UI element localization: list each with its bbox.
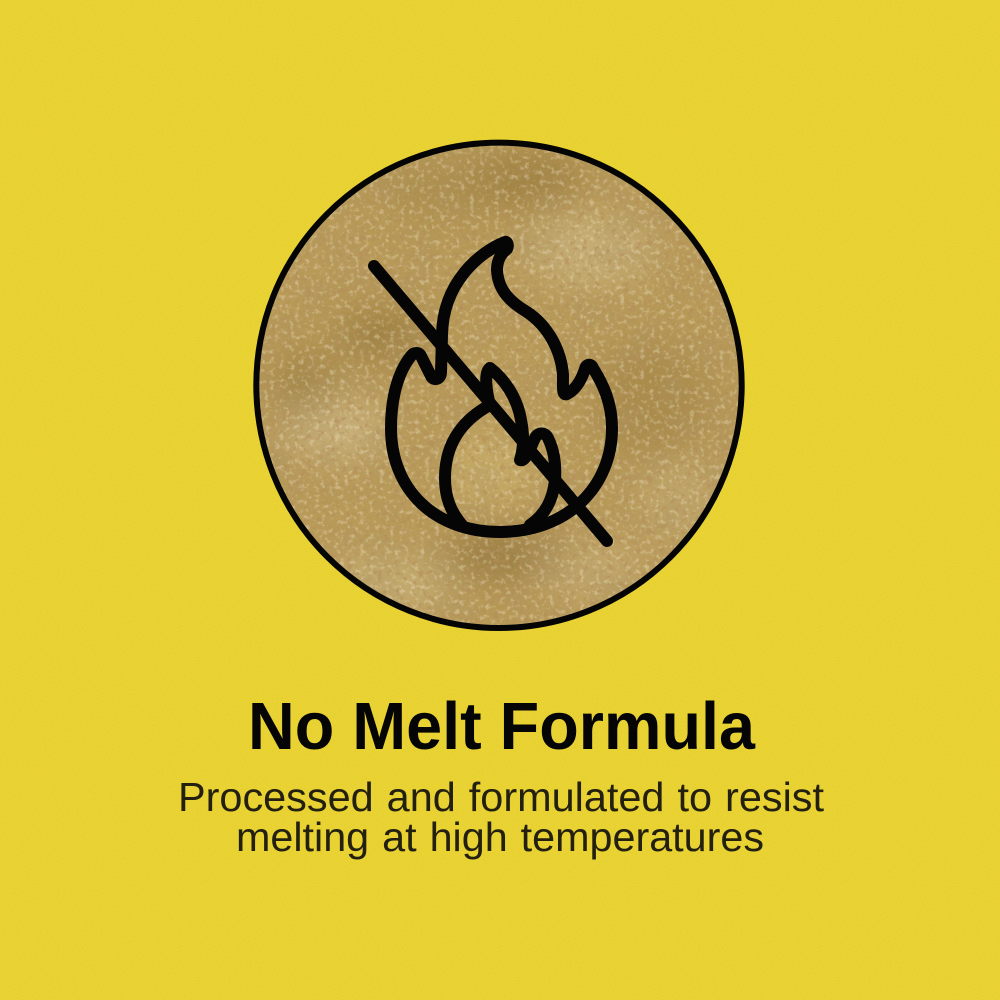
textured circle badge [250,135,750,635]
description text [178,774,825,860]
icon: crossed-out flame [374,242,612,541]
description line 1: Processed and formulated to resist [178,774,825,820]
icon: slash [374,266,607,541]
icon: inner flame [445,368,555,525]
title: No Melt Formula [248,689,756,764]
description line 2: melting at high temperatures [236,814,764,860]
icon: outer flame [391,242,612,532]
